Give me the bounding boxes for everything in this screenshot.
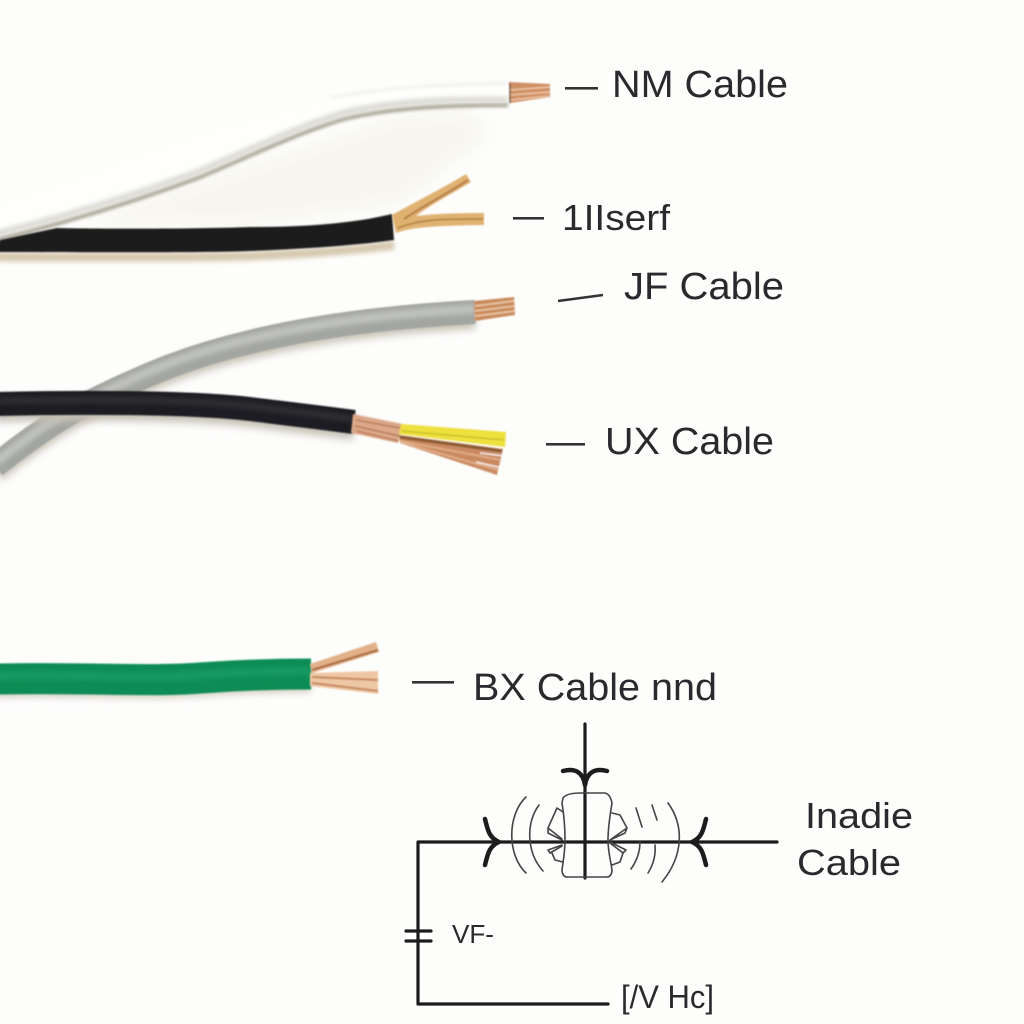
cable: black second conductor — [0, 174, 484, 257]
arrowhead: right — [692, 819, 706, 865]
coil body and field arcs — [512, 793, 679, 882]
label: BX Cable nnd: BX Cable nnd — [473, 667, 717, 709]
label: Inadie Cable: Inadie — [805, 795, 913, 836]
circuit diagram — [406, 724, 777, 1004]
arrowhead: left — [485, 819, 499, 865]
capacitor symbol — [406, 931, 431, 941]
label: VF-: VF- — [452, 919, 494, 949]
label: NM Cable: NM Cable — [612, 64, 788, 106]
label: Inadie Cable: Cable — [797, 842, 901, 883]
cable: gray JF — [0, 297, 515, 472]
copper and yellow conductors — [351, 414, 506, 475]
arrowhead: top — [563, 770, 607, 785]
cable: black UX — [0, 400, 506, 475]
cable: green BX — [0, 642, 379, 694]
label: Inadie Cable — [797, 795, 913, 883]
label: JF Cable — [558, 266, 784, 308]
label: [/V Hc]: [/V Hc] — [621, 979, 714, 1015]
label: UX Cable: UX Cable — [605, 421, 774, 463]
circuit wires — [418, 724, 777, 1004]
label: JF Cable: JF Cable — [624, 266, 784, 308]
cable: white NM — [0, 82, 550, 240]
label: 1IIserf: 1IIserf — [562, 197, 671, 238]
